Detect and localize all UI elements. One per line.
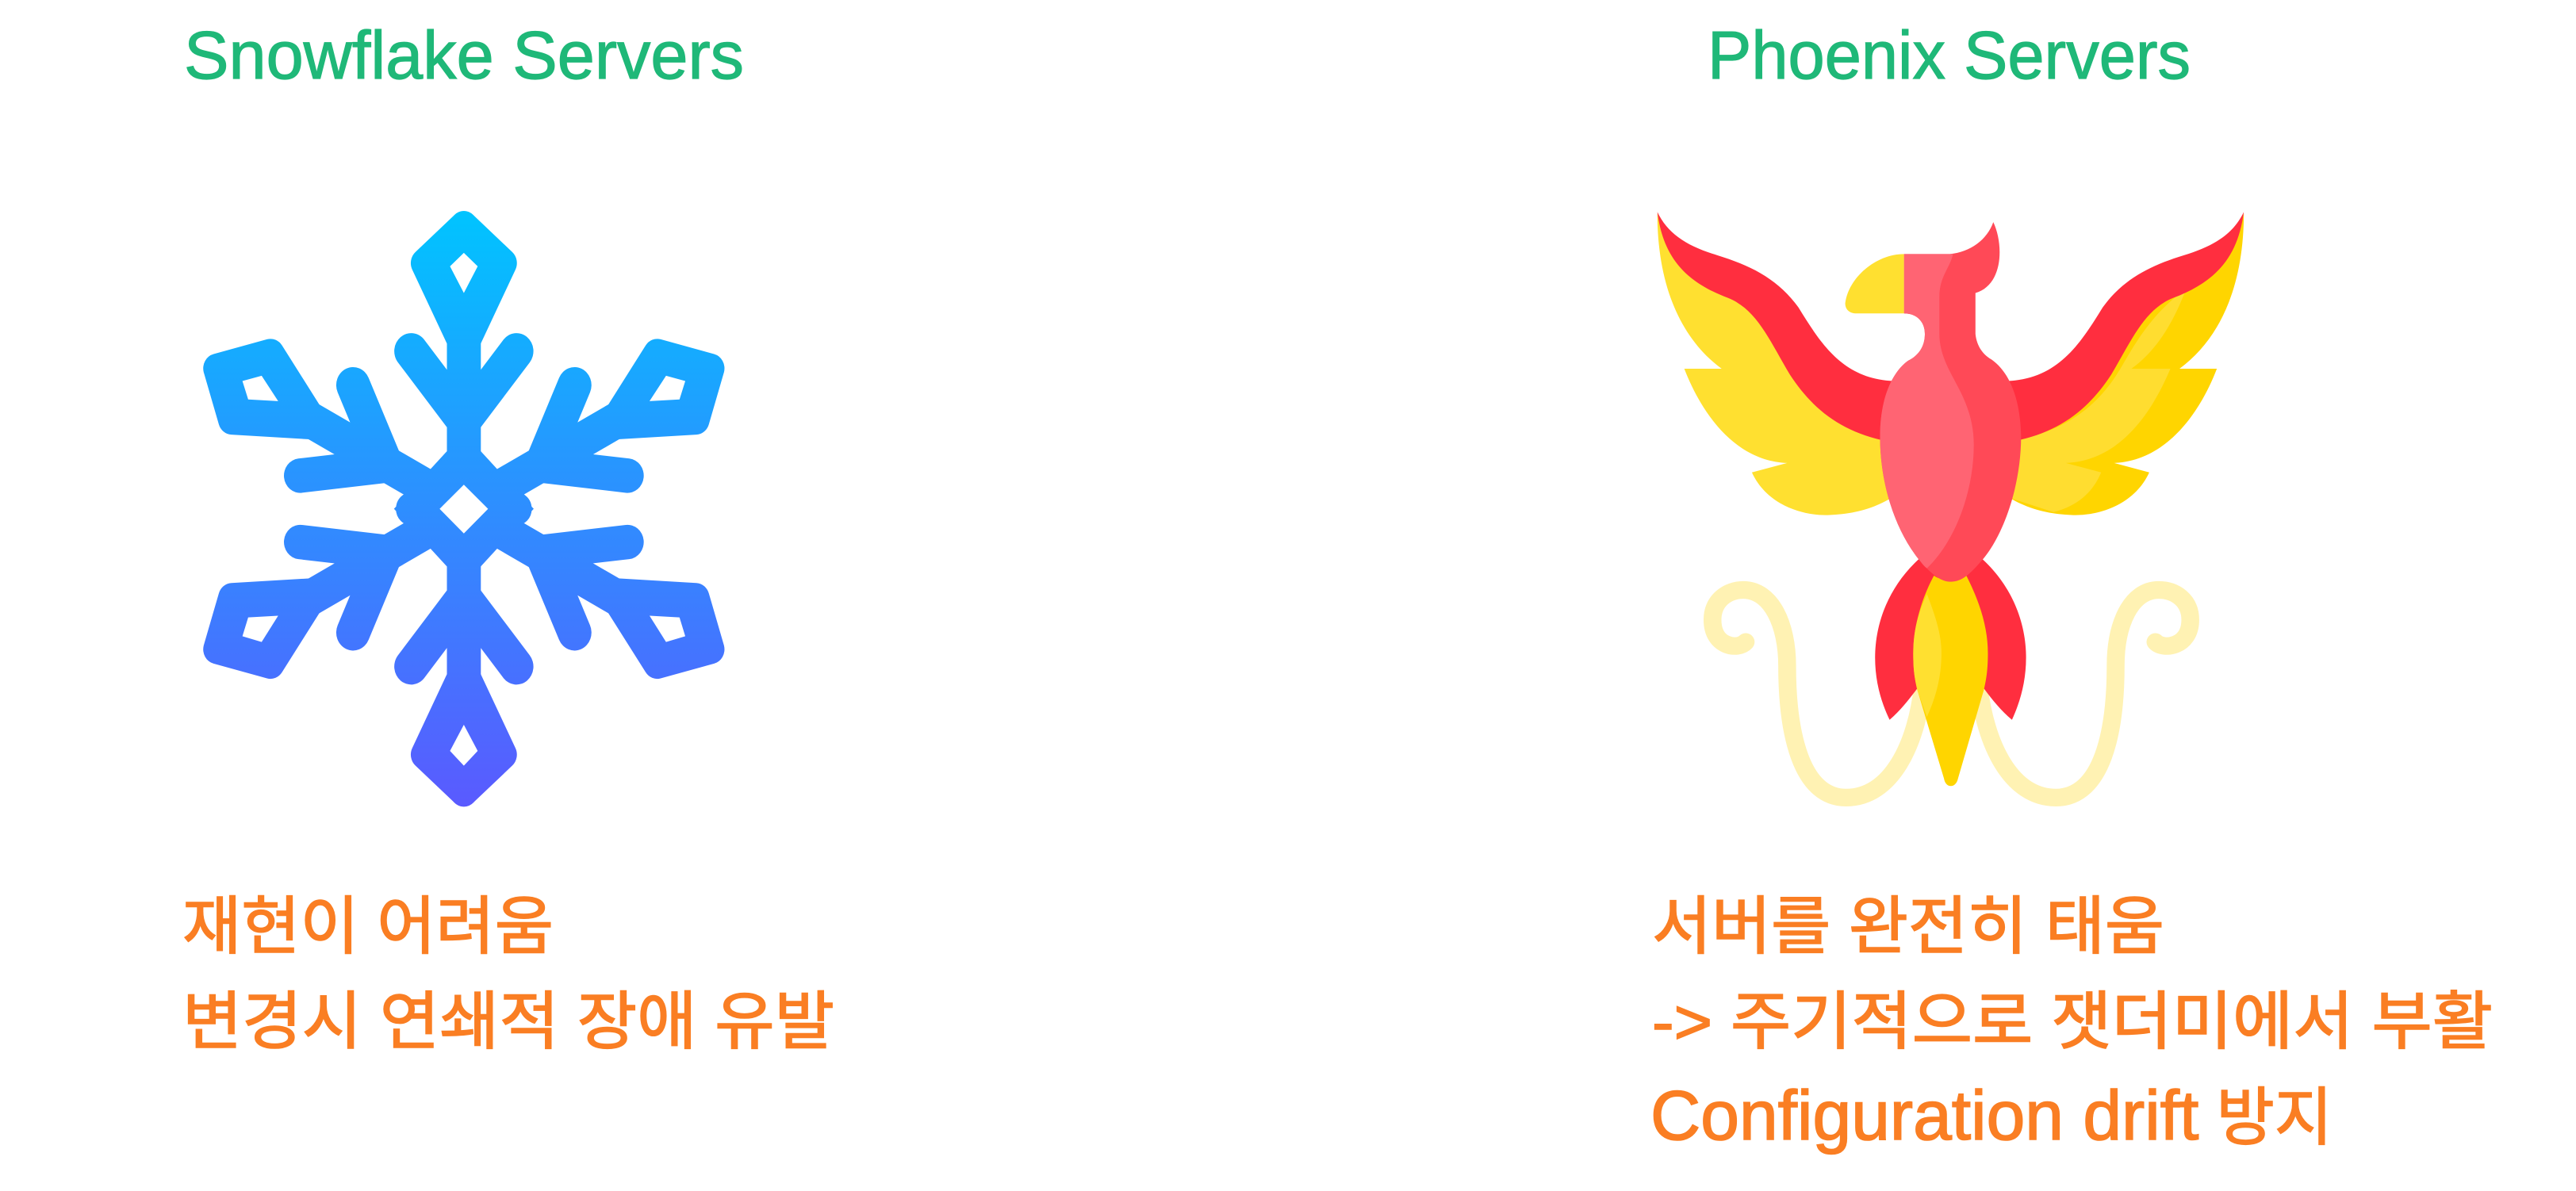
text: phoenix description: Configuration drift 방지 xyxy=(1650,1076,2333,1155)
icon: phoenix xyxy=(1658,212,2244,806)
text: snowflake description: 재현이 어려움 xyxy=(182,891,554,962)
left wing xyxy=(1658,212,1908,515)
icon: snowflake xyxy=(203,211,725,807)
heading: snowflake servers: Snowflake Servers xyxy=(184,18,744,94)
tail swirls xyxy=(1712,590,2191,798)
panel: snowflake servers xyxy=(159,18,834,1057)
panel: phoenix servers xyxy=(1650,18,2493,1155)
right wing xyxy=(1993,212,2244,515)
body and head xyxy=(1846,222,2021,582)
text: phoenix description xyxy=(1650,891,2493,1155)
text: phoenix description: 서버를 완전히 태움 xyxy=(1652,891,2164,962)
text: phoenix description: -> 주기적으로 잿더미에서 부활 xyxy=(1652,986,2493,1057)
heading: phoenix servers: Phoenix Servers xyxy=(1708,18,2191,94)
text: snowflake description: 변경시 연쇄적 장애 유발 xyxy=(182,986,834,1057)
tail feathers xyxy=(1875,559,2026,786)
text: snowflake description xyxy=(182,891,834,1057)
